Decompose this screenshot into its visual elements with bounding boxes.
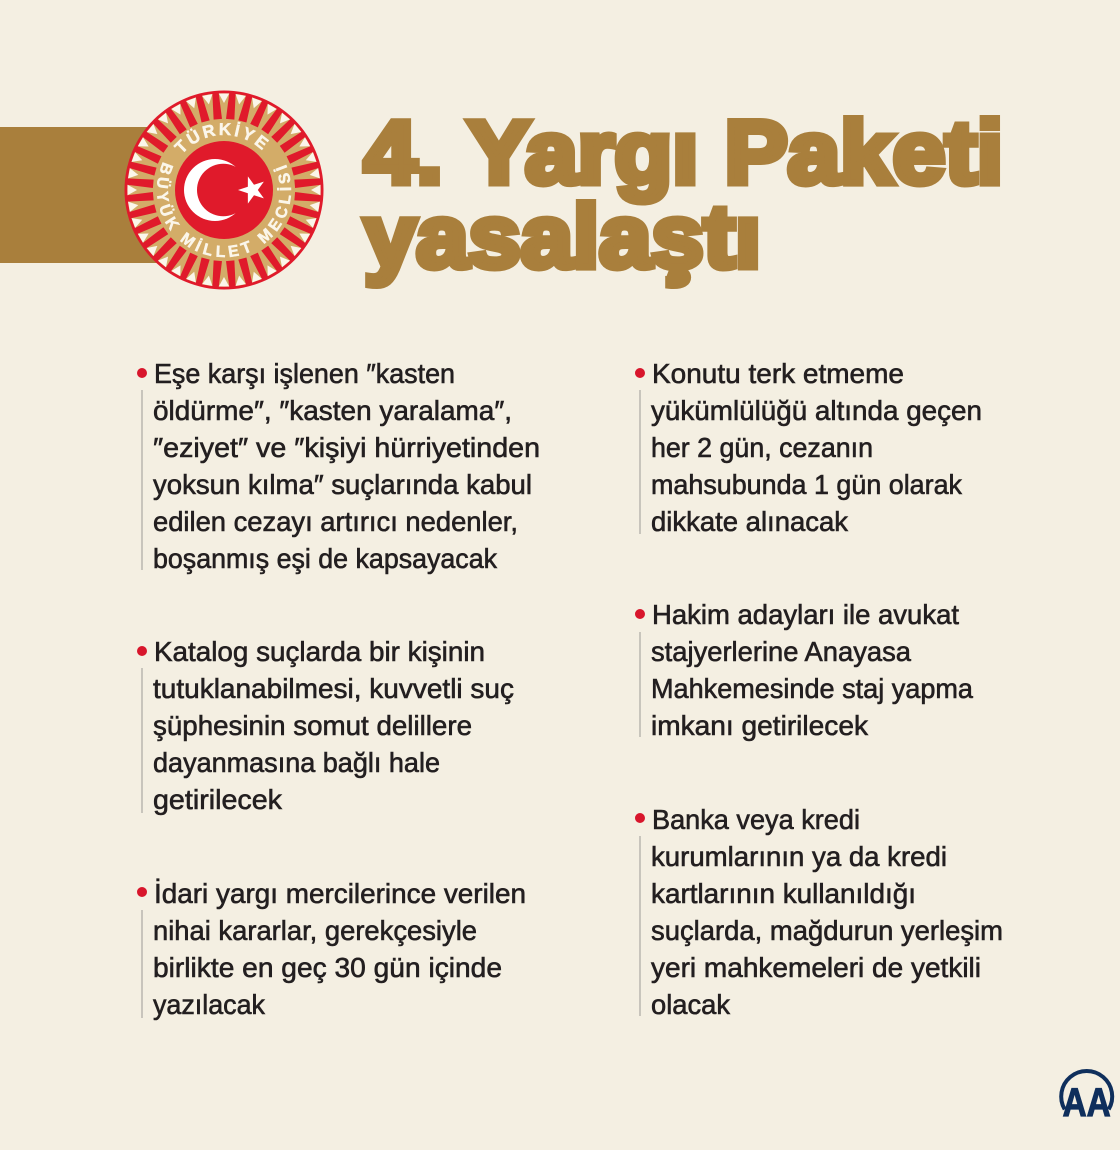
text block: katalog suçlar bbox=[137, 636, 514, 815]
text block: konutu terk etmeme: yükümlülüğü altında geçen bbox=[651, 395, 982, 426]
text block: katalog suçlar: dayanmasına bağlı hale bbox=[153, 747, 440, 778]
text block: katalog suçlar: tutuklanabilmesi, kuvvetli suç bbox=[153, 673, 514, 704]
text block: hakim adayları: stajyerlerine Anayasa bbox=[651, 636, 912, 667]
text block: katalog suçlar: getirilecek bbox=[153, 784, 282, 815]
text block: konutu terk etmeme: Konutu terk etmeme bbox=[652, 358, 904, 389]
text block: hakim adayları bbox=[635, 599, 974, 741]
text block: idari yargı bbox=[137, 878, 526, 1020]
text block: konutu terk etmeme: her 2 gün, cezanın bbox=[651, 432, 873, 463]
text block: banka veya kredi: Banka veya kredi bbox=[652, 804, 860, 835]
text block: banka veya kredi: yeri mahkemeleri de yetkili bbox=[651, 952, 981, 983]
text block: idari yargı: İdari yargı mercilerince verilen bbox=[154, 878, 526, 909]
text block: boşanmış eş: yoksun kılma″ suçlarında kabul bbox=[153, 469, 532, 500]
text block: idari yargı: yazılacak bbox=[153, 989, 265, 1020]
text block: boşanmış eş bbox=[137, 358, 540, 574]
text block: hakim adayları: Mahkemesinde staj yapma bbox=[651, 673, 974, 704]
title bbox=[364, 102, 1003, 286]
text block: boşanmış eş: boşanmış eşi de kapsayacak bbox=[153, 543, 497, 574]
emblem text bottom: BÜYÜK MİLLET MECLİSİ bbox=[157, 162, 292, 258]
text block: boşanmış eş: Eşe karşı işlenen ″kasten bbox=[154, 358, 455, 389]
title: 4. Yargı Paketi bbox=[364, 102, 1003, 202]
text block: banka veya kredi: kartlarının kullanıldığı bbox=[651, 878, 916, 909]
text block: banka veya kredi: suçlarda, mağdurun yerleşim bbox=[651, 915, 1003, 946]
gold header band bbox=[0, 127, 170, 263]
text block: hakim adayları: imkanı getirilecek bbox=[651, 710, 868, 741]
text block: katalog suçlar: şüphesinin somut delillere bbox=[153, 710, 472, 741]
text block: konutu terk etmeme: dikkate alınacak bbox=[651, 506, 848, 537]
text block: konutu terk etmeme: mahsubunda 1 gün olarak bbox=[651, 469, 962, 500]
text block: hakim adayları: Hakim adayları ile avukat bbox=[652, 599, 959, 630]
text block: boşanmış eş: edilen cezayı artırıcı nedenler, bbox=[153, 506, 518, 537]
logo: AA: AA bbox=[1063, 1081, 1111, 1125]
text block: banka veya kredi bbox=[635, 804, 1003, 1020]
star bbox=[238, 176, 264, 204]
text block: katalog suçlar: Katalog suçlarda bir kişinin bbox=[154, 636, 485, 667]
text block: banka veya kredi: kurumlarının ya da kredi bbox=[651, 841, 947, 872]
emblem: Türkiye Büyük Millet Meclisi bbox=[124, 90, 324, 290]
emblem text top: TÜRKİYE bbox=[173, 122, 270, 152]
text block: boşanmış eş: ″eziyet″ ve ″kişiyi hürriyetinden bbox=[153, 432, 540, 463]
text block: konutu terk etmeme bbox=[635, 358, 982, 537]
text block: boşanmış eş: öldürme″, ″kasten yaralama″, bbox=[153, 395, 512, 426]
text block: idari yargı: birlikte en geç 30 gün içinde bbox=[153, 952, 502, 983]
text block: banka veya kredi: olacak bbox=[651, 989, 730, 1020]
crescent bbox=[184, 159, 246, 221]
text block: idari yargı: nihai kararlar, gerekçesiyle bbox=[153, 915, 477, 946]
title: yasalaştı bbox=[364, 186, 761, 286]
